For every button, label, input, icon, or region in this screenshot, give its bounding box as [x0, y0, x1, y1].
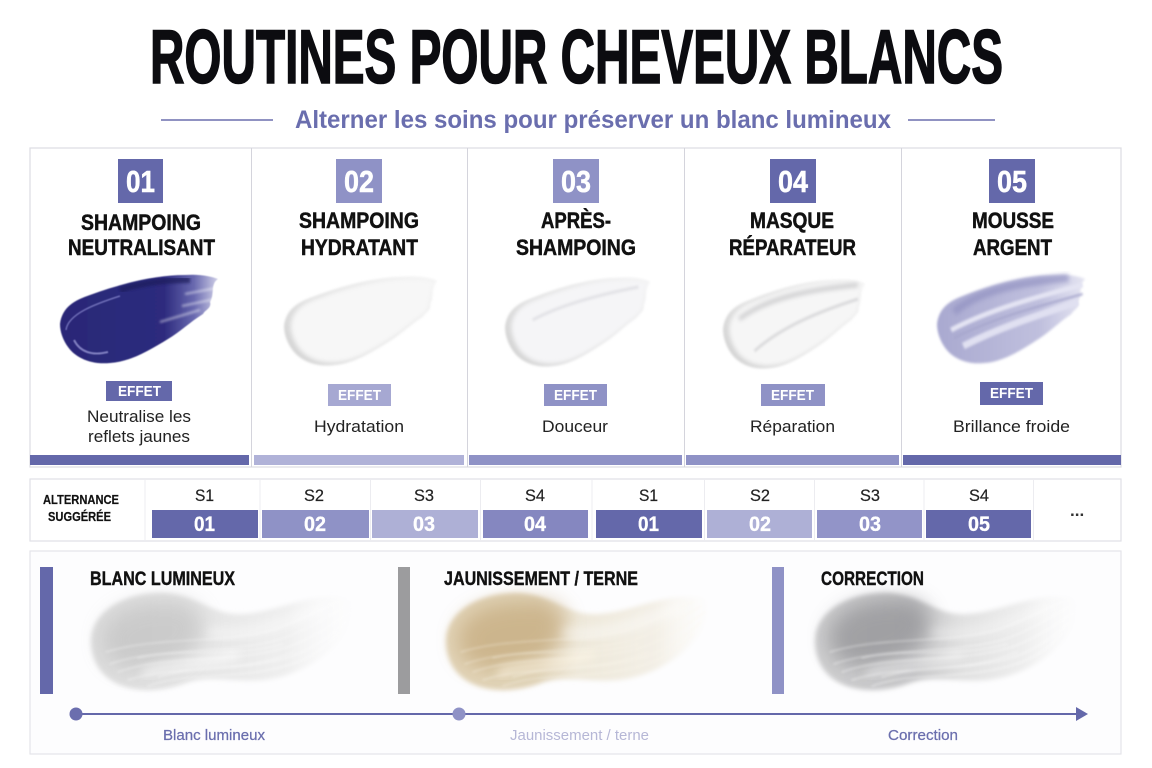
swatch: silver mousse [937, 275, 1086, 363]
week 2 repeat: 02 [707, 486, 812, 538]
heading 01 [68, 210, 215, 260]
week 1: 01: S1 [195, 486, 214, 505]
heading 02 [299, 208, 419, 260]
state: correction [772, 567, 1077, 694]
week 3 repeat: 03 [817, 486, 922, 538]
heading 05: ARGENT [973, 235, 1052, 260]
week 1: 01: 01 [194, 513, 215, 536]
heading 05: MOUSSE [972, 208, 1054, 233]
timeline label 3: Correction [888, 727, 958, 744]
week 2: 02 [262, 486, 369, 538]
effect text 05: Brillance froide [953, 417, 1070, 436]
hair swatch: silver [91, 593, 353, 690]
week 4 repeat: 05: S4 [969, 486, 989, 505]
effect tag 01 [106, 381, 172, 401]
badge 02: 02 [344, 164, 374, 199]
panel: suggested alternation [30, 479, 1121, 541]
heading 04: MASQUE [750, 208, 834, 233]
effect text 01 [87, 407, 191, 446]
heading 04: RÉPARATEUR [729, 235, 856, 260]
effect tag 03: EFFET [554, 387, 597, 404]
week 1 repeat: 01: 01 [638, 513, 659, 536]
badge 05 [989, 159, 1035, 203]
state: blanc lumineux [40, 567, 353, 694]
week 4: 04 [483, 486, 588, 538]
week 3 repeat: 03: 03 [859, 513, 881, 536]
effect text 01: Neutralise les [87, 407, 191, 426]
timeline label 1: Blanc lumineux [163, 727, 266, 744]
heading 05 [972, 208, 1054, 260]
badge 01: 01 [126, 164, 155, 199]
effect tag 05 [980, 382, 1043, 405]
week 1 repeat: 01 [596, 486, 702, 538]
week 3 repeat: 03: S3 [860, 486, 880, 505]
effect tag 03 [544, 384, 607, 406]
ellipsis: ... [1070, 501, 1084, 520]
panel: hair states [30, 551, 1121, 754]
swatch: navy shampoo [60, 275, 222, 363]
week 3: 03: S3 [414, 486, 434, 505]
effect tag 04: EFFET [771, 387, 814, 404]
state bar 2 [398, 567, 410, 694]
week 1: 01 [152, 486, 258, 538]
week 4: 04: S4 [525, 486, 545, 505]
effect text 01: reflets jaunes [88, 427, 190, 446]
effect tag 04 [761, 384, 825, 406]
effect text 03: Douceur [542, 417, 608, 436]
swatch: conditioner [505, 278, 650, 366]
badge 02 [336, 159, 382, 203]
bar 02 [254, 455, 464, 465]
week 4: 04: 04 [524, 513, 546, 536]
card 01: shampoing neutralisant [30, 159, 249, 465]
heading 02: SHAMPOING [299, 208, 419, 233]
week 3: 03 [372, 486, 478, 538]
row label: ALTERNANCE [43, 492, 119, 507]
badge 05: 05 [997, 164, 1027, 199]
effect text 02: Hydratation [314, 417, 404, 436]
week 2: 02: 02 [304, 513, 326, 536]
card 03: après-shampoing [469, 159, 682, 465]
badge 04 [770, 159, 816, 203]
heading 04 [729, 208, 856, 260]
state heading 3: CORRECTION [821, 569, 924, 590]
heading 03: SHAMPOING [516, 235, 636, 260]
card 05: mousse argent [903, 159, 1121, 465]
week 4 repeat: 05 [926, 486, 1031, 538]
effect tag 02: EFFET [338, 387, 381, 404]
row label [43, 492, 119, 524]
heading 02: HYDRATANT [301, 235, 418, 260]
week 4 repeat: 05: 05 [968, 513, 990, 536]
bar 04 [686, 455, 899, 465]
timeline label 2: Jaunissement / terne [510, 727, 649, 744]
row label: SUGGÉRÉE [48, 509, 111, 524]
card 04: masque réparateur [686, 159, 899, 465]
effect tag 02 [328, 384, 391, 406]
heading 03: APRÈS- [541, 208, 611, 233]
heading 03 [516, 208, 636, 260]
heading 01: SHAMPOING [81, 210, 201, 235]
badge 03: 03 [561, 164, 591, 199]
timeline arrow [70, 707, 1088, 721]
heading 01: NEUTRALISANT [68, 235, 215, 260]
week 2 repeat: 02: 02 [749, 513, 771, 536]
swatch: repair mask [723, 280, 865, 368]
hair swatch: yellowed [446, 593, 708, 690]
badge 04: 04 [778, 164, 809, 199]
week 1 repeat: 01: S1 [639, 486, 658, 505]
badge 01 [118, 159, 163, 203]
swatch: white shampoo [284, 277, 437, 365]
state bar 3 [772, 567, 784, 694]
bar 03 [469, 455, 682, 465]
hair swatch: grey [815, 593, 1077, 690]
effect tag 05: EFFET [990, 385, 1033, 402]
bar 05 [903, 455, 1121, 465]
badge 03 [553, 159, 599, 203]
week 2: 02: S2 [304, 486, 324, 505]
panel: products [30, 148, 1121, 467]
week 3: 03: 03 [413, 513, 435, 536]
card 02: shampoing hydratant [254, 159, 464, 465]
state heading 1: BLANC LUMINEUX [90, 569, 235, 590]
bar 01 [30, 455, 249, 465]
state heading 2: JAUNISSEMENT / TERNE [444, 569, 638, 590]
week 2 repeat: 02: S2 [750, 486, 770, 505]
state bar 1 [40, 567, 53, 694]
subtitle: Alterner les soins pour préserver un blanc lumineux [295, 106, 891, 134]
effect tag 01: EFFET [118, 383, 161, 400]
state: jaunissement / terne [398, 567, 708, 694]
effect text 04: Réparation [750, 417, 835, 436]
